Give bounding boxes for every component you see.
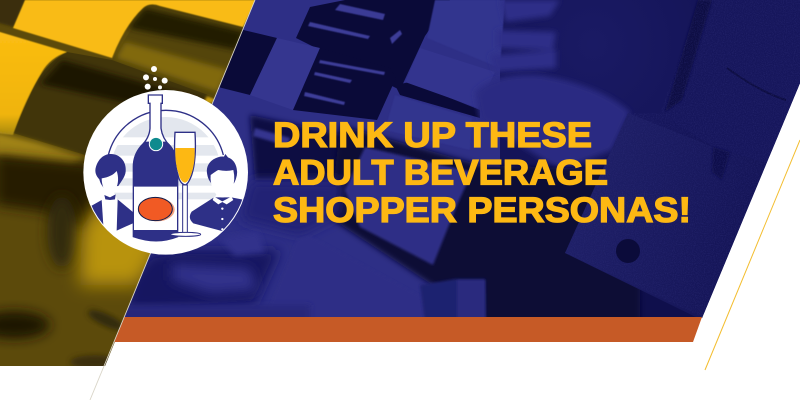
cuff button bbox=[616, 239, 640, 263]
man persona bbox=[190, 154, 245, 231]
bottle outline bbox=[133, 95, 178, 241]
flute stem bbox=[183, 185, 187, 233]
orange seal shadow bbox=[140, 198, 175, 221]
bubbles bbox=[143, 66, 168, 90]
left dark patch bbox=[125, 250, 280, 312]
light stripe behind title bbox=[253, 128, 290, 146]
lower-left shadow bbox=[0, 311, 50, 339]
fingers bbox=[500, 0, 560, 74]
lower dark area bbox=[0, 155, 110, 232]
mid dark band bbox=[330, 125, 640, 330]
upper bottle glints bbox=[308, 22, 402, 44]
title line 3: SHOPPER PERSONAS! bbox=[273, 190, 691, 230]
badge circle bbox=[83, 90, 248, 255]
man body bbox=[190, 197, 245, 231]
champagne flute bbox=[171, 132, 201, 236]
gap shadow under bottles bbox=[395, 82, 480, 118]
upper bottle highlight bbox=[335, 4, 385, 20]
title bbox=[273, 115, 691, 230]
top bottle sheen bbox=[116, 42, 228, 92]
back-left bottle dark bbox=[220, 30, 277, 95]
title line 2: ADULT BEVERAGE bbox=[273, 152, 608, 192]
finger highlights lower bbox=[172, 264, 257, 293]
blurred yellow ridge bbox=[0, 132, 85, 165]
bottle base fill bbox=[134, 230, 177, 241]
divider line white bbox=[90, 0, 255, 400]
woman face bbox=[102, 171, 118, 195]
front bottle reflections bbox=[304, 60, 385, 105]
woman persona bbox=[90, 154, 142, 231]
top-left dark corner bbox=[0, 0, 28, 27]
hand bbox=[475, 75, 630, 170]
man buttons bbox=[221, 207, 223, 230]
panel: yellow duotone wine bottle photo bbox=[0, 0, 260, 369]
jacket dark fold bbox=[665, 0, 712, 112]
background stripes bbox=[103, 117, 227, 199]
woman hair bbox=[95, 154, 126, 187]
dark blob bbox=[47, 196, 77, 268]
flute base bbox=[171, 232, 201, 236]
lower-left strip light bbox=[130, 304, 308, 317]
second bottle dark stripe bbox=[40, 58, 204, 104]
mid light box bbox=[345, 147, 472, 265]
label boxes bbox=[406, 82, 455, 100]
right side dark backdrop bbox=[500, 0, 800, 325]
bottle shoulder fill bbox=[134, 142, 177, 187]
man collar bbox=[213, 197, 233, 204]
front bottle glass bbox=[293, 48, 396, 120]
second bottle body bbox=[13, 52, 222, 160]
pocket seam bbox=[727, 68, 786, 100]
lower dark spot bbox=[86, 308, 122, 332]
ring bbox=[108, 110, 223, 155]
orange band bbox=[114, 317, 702, 342]
icon: personas badge bbox=[83, 66, 248, 255]
front bottle label bbox=[250, 38, 320, 110]
top bottle body bbox=[128, 34, 210, 96]
woman jacket right bbox=[117, 199, 142, 231]
bottle neck bbox=[420, 279, 486, 322]
teal seal bbox=[149, 137, 163, 151]
upper bottle dark bbox=[296, 0, 450, 90]
cuff bbox=[565, 113, 766, 320]
top yellow label band bbox=[13, 0, 256, 58]
dark left stripes below bottle bbox=[250, 115, 345, 180]
man face bbox=[211, 170, 234, 197]
top bottle dark stripe bbox=[128, 8, 245, 50]
fabric grain bbox=[560, 0, 800, 320]
flute glass bbox=[175, 132, 195, 185]
bottom shadow bbox=[69, 353, 110, 366]
second yellow label band bbox=[0, 32, 67, 135]
accent line yellow bbox=[705, 140, 800, 370]
cuff crease bbox=[712, 147, 730, 180]
orange seal bbox=[138, 197, 172, 221]
mid left haze bbox=[240, 180, 345, 235]
man hair bbox=[207, 154, 237, 183]
big label bbox=[262, 236, 433, 325]
title line 1: DRINK UP THESE bbox=[273, 115, 592, 155]
upper sleeve bbox=[660, 0, 800, 163]
woman jacket left bbox=[90, 200, 103, 225]
flute liquid bbox=[175, 148, 195, 183]
woman bow tie bbox=[104, 194, 116, 200]
second bottle edge glint bbox=[204, 96, 217, 104]
lower yellow highlight bbox=[80, 205, 165, 285]
second bottle highlight bbox=[110, 112, 205, 160]
panel: blue duotone shopper photo bbox=[120, 0, 800, 330]
bottle bbox=[133, 95, 178, 241]
